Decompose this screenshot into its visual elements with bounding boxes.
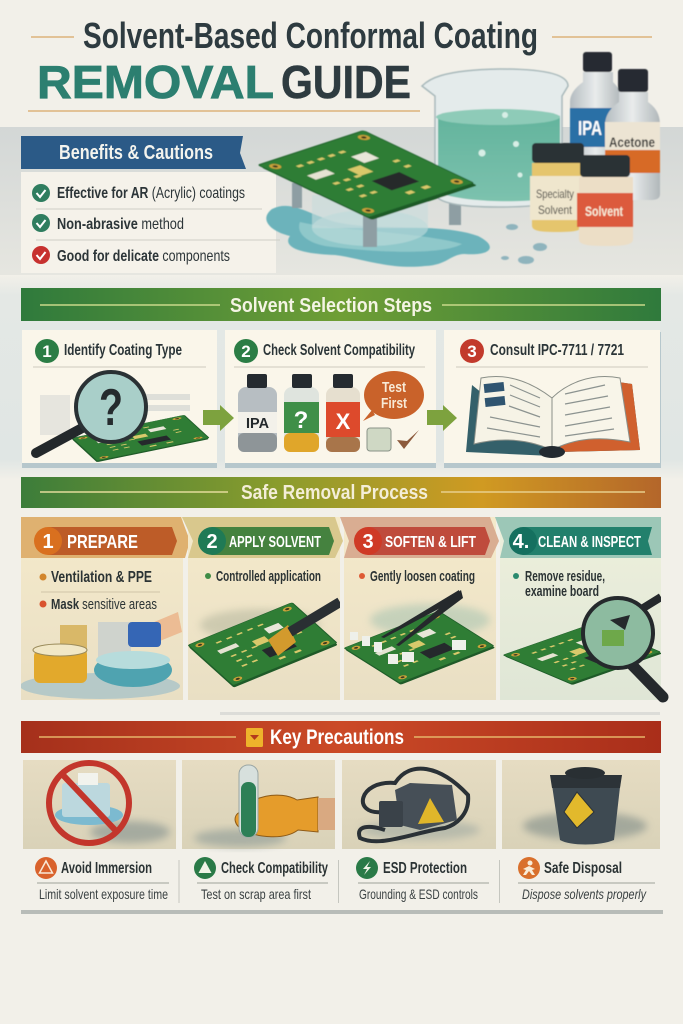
process 2 ribbon: APPLY SOLVENT	[229, 534, 321, 551]
icon: magnifier	[583, 598, 663, 697]
icon: orange person	[518, 857, 540, 879]
jar: specialty solvent: Specialty	[536, 187, 574, 201]
step 2 number badge: 2	[241, 342, 251, 361]
panel: step 1 identify coating type	[22, 330, 217, 468]
bullet: controlled application	[205, 568, 321, 585]
ground stain	[20, 673, 180, 699]
icon: orange warning	[35, 857, 57, 879]
illustration: tweezers on board	[343, 590, 496, 685]
section heading: safe removal process	[21, 477, 661, 508]
bullet: mask sensitive areas: Mask sensitive areas	[51, 596, 157, 613]
icon: magnifier over PCB: ?	[99, 379, 123, 437]
step 1 label: Identify Coating Type	[64, 342, 182, 359]
board legs	[292, 183, 461, 247]
glass stand	[312, 210, 428, 246]
bullet: ventilation and PPE: Ventilation & PPE	[51, 569, 152, 586]
precaution: avoid immersion	[35, 857, 169, 902]
bottle: unknown solvent	[284, 374, 319, 452]
panel: process 4 clean and inspect	[495, 517, 663, 700]
section heading: safe removal process: Safe Removal Process	[241, 482, 428, 504]
benefits list background	[21, 172, 276, 273]
precaution: safe disposal	[518, 857, 655, 902]
benefit: good for delicate components: Good for delicate components	[57, 248, 230, 265]
section heading: solvent selection steps: Solvent Selection Steps	[230, 295, 432, 317]
process 4 ribbon	[509, 527, 652, 555]
bullet: controlled application: Controlled application	[216, 568, 321, 585]
section heading: key precautions: Key Precautions	[270, 726, 404, 749]
illustration: board on the bench	[502, 597, 663, 685]
title: Solvent-Based Conformal Coating	[83, 15, 538, 56]
callout: test first: First	[381, 395, 407, 412]
bottle: unknown solvent: ?	[294, 407, 308, 434]
arrow: step 2 to step 3	[427, 405, 457, 431]
illustration: masking supplies	[33, 612, 182, 687]
callout: test first	[363, 371, 424, 421]
bullet: ventilation and PPE	[40, 569, 152, 586]
benefits heading ribbon: Benefits & Cautions	[59, 142, 213, 164]
droplets	[501, 224, 547, 264]
section heading: solvent selection steps	[21, 288, 661, 321]
puddle	[266, 206, 490, 267]
bullet: gently loosen coating	[359, 568, 475, 585]
stain behind board	[200, 609, 320, 641]
icon: open book	[466, 376, 640, 458]
icon: green bolt	[356, 857, 378, 879]
benefit: effective for AR coatings: Effective for AR (Acrylic) coatings	[57, 185, 245, 202]
precaution: ESD protection: Grounding & ESD controls	[359, 886, 478, 902]
step 2 number badge	[234, 339, 258, 363]
circuit board	[257, 130, 478, 220]
arrow: step 1 to step 2	[203, 405, 234, 431]
jar: specialty solvent: Solvent	[538, 203, 573, 217]
icon: green warning	[194, 857, 216, 879]
illustration: brush on board	[187, 602, 340, 688]
precaution: check compatibility	[194, 857, 328, 902]
section 2 backdrop	[0, 275, 683, 480]
jar: solvent	[577, 155, 633, 246]
step 1 number badge	[35, 339, 59, 363]
process 1 ribbon	[34, 527, 177, 555]
bullet: remove residue, examine board	[513, 568, 605, 600]
bottle: IPA: IPA	[246, 415, 269, 432]
benefit: non-abrasive method: Non-abrasive method	[57, 216, 184, 233]
bottle: IPA	[238, 374, 277, 452]
icon: prohibition sign	[49, 763, 129, 843]
process 3 ribbon	[354, 527, 490, 555]
bottle: Acetone	[605, 69, 660, 200]
panel: process 2 apply solvent	[182, 517, 343, 700]
icon: gloved hand	[235, 795, 318, 837]
step 2 label: Check Solvent Compatibility	[263, 342, 415, 359]
process 3 ribbon: 3	[362, 531, 374, 553]
process 3 ribbon: SOFTEN & LIFT	[385, 534, 476, 551]
bottle: IPA	[570, 52, 621, 197]
precaution: ESD protection: ESD Protection	[383, 860, 467, 877]
process 4 ribbon: 4.	[513, 531, 529, 553]
icon: disposal bin	[550, 767, 622, 844]
precaution: ESD protection	[356, 857, 489, 902]
process 1 ribbon: PREPARE	[67, 532, 138, 552]
process 1 ribbon: 1	[42, 531, 54, 553]
title: GUIDE	[281, 56, 411, 108]
bottle: Acetone: Acetone	[609, 134, 655, 150]
process 4 ribbon: CLEAN & INSPECT	[538, 534, 641, 551]
step 3 number badge	[460, 339, 484, 363]
precaution: check compatibility: Check Compatibility	[221, 860, 328, 877]
bullet: gently loosen coating: Gently loosen coating	[370, 568, 475, 585]
precaution: avoid immersion: Limit solvent exposure time	[39, 886, 168, 902]
icon: magnifier over PCB	[36, 372, 210, 462]
process 2 ribbon	[198, 527, 334, 555]
hero grey band	[0, 127, 683, 275]
bottle: incompatible solvent: X	[336, 409, 351, 434]
benefits heading ribbon	[21, 136, 246, 169]
bullet: remove residue, examine board: Remove residue,	[525, 568, 605, 585]
bottle: incompatible solvent	[326, 374, 360, 452]
icon: warning square	[246, 728, 263, 747]
step 1 number badge: 1	[42, 342, 52, 361]
icon: sample jar and check	[367, 428, 419, 451]
panel: benefits and cautions	[21, 136, 280, 273]
panel: process 3 soften and lift	[340, 517, 499, 700]
precaution: safe disposal: Dispose solvents properly	[522, 886, 647, 902]
step 3 number badge: 3	[467, 342, 477, 361]
illustration: solvent puddle, PCB and bottles	[257, 52, 660, 267]
panel: avoid immersion image	[23, 760, 176, 849]
panel: ESD protection image	[342, 760, 496, 849]
bullet: remove residue, examine board: examine board	[525, 583, 599, 600]
step 3 label: Consult IPC-7711 / 7721	[490, 342, 624, 359]
precaution: safe disposal: Safe Disposal	[544, 860, 622, 877]
jar: solvent: Solvent	[585, 203, 623, 219]
panel: step 3 consult IPC	[444, 330, 661, 468]
beaker	[422, 69, 568, 207]
icon: ESD strap and box	[359, 769, 468, 841]
benefit: non-abrasive method	[32, 214, 184, 233]
bottle: IPA: IPA	[578, 118, 602, 140]
stain behind board	[370, 604, 490, 636]
faint divider above precautions	[220, 712, 660, 715]
callout: test first: Test	[382, 379, 406, 396]
panel: safe disposal image	[502, 760, 660, 849]
section heading: key precautions	[21, 721, 661, 753]
jar: specialty solvent	[530, 143, 584, 232]
panel: process 1 prepare	[20, 517, 190, 700]
icon: test tube	[239, 765, 258, 837]
panel: step 2 check solvent compatibility	[225, 330, 436, 468]
title: REMOVAL	[37, 56, 274, 108]
precaution: check compatibility: Test on scrap area first	[201, 886, 311, 902]
title	[28, 15, 652, 111]
precaution: avoid immersion: Avoid Immersion	[61, 860, 152, 877]
process 2 ribbon: 2	[206, 531, 218, 553]
panel: check compatibility image	[182, 760, 335, 849]
